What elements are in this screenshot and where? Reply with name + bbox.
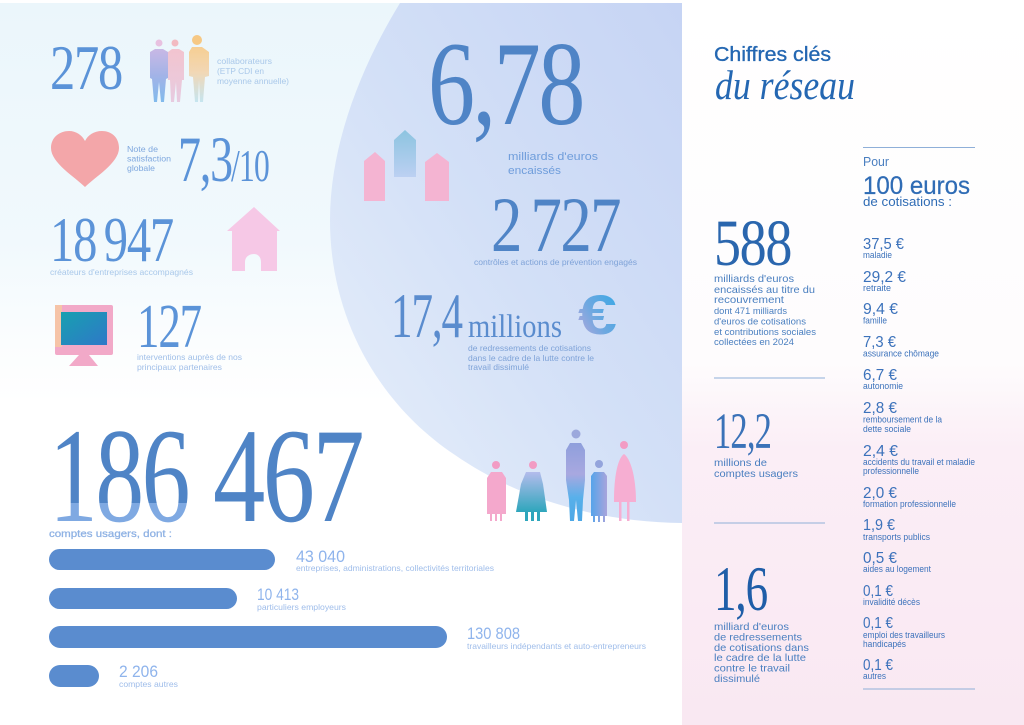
item: autres: 0,1 € <box>863 657 893 674</box>
stat: satisfaction note: /10 <box>231 141 269 191</box>
stat: 1,6 milliard: dissimulé <box>714 673 760 685</box>
item: remboursement de la dette sociale: 2,8 € <box>863 400 897 417</box>
item: invalidité décès: 0,1 € <box>863 583 893 600</box>
stat: satisfaction note: satisfaction <box>127 154 171 164</box>
stat: 588 milliards: d'euros de cotisations <box>714 316 807 326</box>
item: remboursement de la dette sociale <box>863 400 942 434</box>
item: autonomie: autonomie <box>863 381 903 391</box>
item: autres <box>863 657 893 681</box>
stat: 6,78 milliards: milliards d'euros <box>508 151 599 163</box>
stat: 17,4 millions: millions <box>468 309 562 345</box>
item: famille: famille <box>863 316 887 326</box>
stat: 6,78 milliards: 6,78 <box>428 17 583 150</box>
item: accidents du travail: professionnelle <box>863 466 919 476</box>
stat: 17,4 millions: 17,4 <box>391 281 463 351</box>
stat: 278 collaborateurs <box>50 33 289 103</box>
stat: 18 947 créateurs: 18 947 <box>50 205 173 275</box>
stat: 1,6 milliard: 1,6 <box>714 553 767 624</box>
item: autonomie: 6,7 € <box>863 367 897 384</box>
bar: 2 206 <box>49 662 178 689</box>
stat: 127 interventions: interventions auprès de nos <box>137 352 242 362</box>
stat: 278 collaborateurs: moyenne annuelle) <box>217 76 289 86</box>
item: assurance chômage <box>863 334 939 358</box>
item: emploi des travailleurs handicapés <box>863 615 945 649</box>
icon: three buildings <box>364 130 449 201</box>
icon: three people <box>150 35 209 102</box>
item: accidents du travail: 2,4 € <box>863 443 898 460</box>
bar chart: comptes usagers <box>49 547 646 689</box>
item: retraite <box>863 269 906 293</box>
stat: 12,2 millions: millions de <box>714 457 767 469</box>
panel: background left <box>0 0 682 725</box>
stat: 2 727 contrôles: contrôles et actions de prévention engagés <box>474 257 637 267</box>
icon: monitor <box>55 305 113 366</box>
bar: 2 206: comptes autres <box>119 679 178 689</box>
stat: 588 milliards: et contributions sociales <box>714 327 817 337</box>
item: retraite: retraite <box>863 283 891 293</box>
panel: background right <box>682 0 1024 725</box>
stat: satisfaction note: 7,3 <box>178 124 232 196</box>
bar: 10 413: particuliers employeurs <box>257 602 346 612</box>
stat: 186 467 comptes usagers: 467 <box>213 402 362 551</box>
item: emploi des travailleurs handicapés: emploi des travailleurs <box>863 630 945 640</box>
bar: 2 206: 2 206 <box>119 662 158 681</box>
stat: 1,6 milliard: de cotisations dans <box>714 642 809 654</box>
stat: 12,2 millions: comptes usagers <box>714 468 798 480</box>
stat: 588 milliards: encaissés au titre du <box>714 284 815 296</box>
stat: 6,78 milliards <box>364 17 599 201</box>
stat: 127 interventions <box>55 293 242 372</box>
item: formation professionnelle: formation professionnelle <box>863 499 956 509</box>
bar: 130 808: 130 808 <box>467 624 520 643</box>
stat: 278 collaborateurs: collaborateurs <box>217 56 272 66</box>
item: formation professionnelle: 2,0 € <box>863 485 897 502</box>
icon: house <box>227 207 280 271</box>
item: autres: autres <box>863 671 886 681</box>
list heading: pour 100 euros: 100 euros <box>863 172 970 200</box>
stat: 6,78 milliards: encaissés <box>508 165 562 177</box>
stat: 278 collaborateurs: 278 <box>50 33 122 103</box>
stat: 127 interventions: 127 <box>137 293 201 361</box>
list heading: pour 100 euros: de cotisations : <box>863 194 952 209</box>
icon: euro: € <box>578 283 617 346</box>
item: remboursement de la dette sociale: dette sociale <box>863 424 911 434</box>
title <box>714 44 855 108</box>
stat: 588 milliards: milliards d'euros <box>714 273 794 285</box>
stat: 2 727 contrôles: 2 727 <box>491 181 620 268</box>
stat: 186 467 comptes usagers: comptes usagers, dont : <box>49 528 172 540</box>
item: autonomie <box>863 367 903 391</box>
stat: 186 467 comptes usagers: 186 <box>49 402 188 551</box>
item: remboursement de la dette sociale: remboursement de la <box>863 414 942 424</box>
stat: 1,6 milliard: de redressements <box>714 632 802 644</box>
stat: satisfaction note <box>51 124 269 196</box>
item: maladie <box>863 236 904 260</box>
item: famille <box>863 301 898 326</box>
item: invalidité décès: invalidité décès <box>863 597 920 607</box>
list heading: pour 100 euros: Pour <box>863 155 889 169</box>
item: aides au logement: aides au logement <box>863 564 931 574</box>
bar: 43 040: 43 040 <box>296 547 345 566</box>
stat: 588 milliards: dont 471 milliards <box>714 306 788 316</box>
item: invalidité décès <box>863 583 920 607</box>
item: emploi des travailleurs handicapés: 0,1 € <box>863 615 893 632</box>
stat: 1,6 milliard: le cadre de la lutte <box>714 652 806 664</box>
stat: 17,4 millions: dans le cadre de la lutte contre le <box>468 353 594 363</box>
bar: 130 808 <box>49 624 646 651</box>
stat: 1,6 milliard: contre le travail <box>714 662 790 674</box>
item: assurance chômage: assurance chômage <box>863 348 939 358</box>
stat: 588 milliards: collectées en 2024 <box>714 337 794 347</box>
stat: 186 467 comptes usagers <box>49 402 362 551</box>
item: formation professionnelle <box>863 485 956 509</box>
stat: 588 milliards: 588 <box>714 207 791 280</box>
item: transports publics <box>863 517 930 542</box>
list heading: pour 100 euros <box>863 147 975 209</box>
item: assurance chômage: 7,3 € <box>863 334 896 351</box>
item: maladie: 37,5 € <box>863 236 904 253</box>
bar: 130 808: travailleurs indépendants et auto-entrepreneurs <box>467 641 646 651</box>
stat: 17,4 millions: travail dissimulé <box>468 362 529 372</box>
title: du réseau <box>715 62 855 108</box>
stat: satisfaction note: Note de <box>127 144 158 154</box>
stat: 278 collaborateurs: (ETP CDI en <box>217 66 264 76</box>
item: transports publics: 1,9 € <box>863 517 895 534</box>
icon: heart <box>51 131 119 187</box>
item: accidents du travail: accidents du travail et maladie <box>863 457 975 467</box>
bar: 43 040: entreprises, administrations, collectivités territoriales <box>296 563 494 573</box>
title: Chiffres clés <box>714 44 831 66</box>
bar: 10 413: 10 413 <box>257 585 299 604</box>
stat: 127 interventions: principaux partenaires <box>137 362 222 372</box>
item: accidents du travail <box>863 443 975 476</box>
stat: 12,2 millions: 12,2 <box>714 404 771 460</box>
item: retraite: 29,2 € <box>863 269 906 286</box>
list: répartition des cotisations <box>863 236 975 681</box>
stat: satisfaction note: globale <box>127 163 155 173</box>
item: transports publics: transports publics <box>863 532 930 542</box>
stat: 588 milliards <box>714 207 817 347</box>
icon: family <box>487 430 636 522</box>
item: aides au logement <box>863 550 931 574</box>
stat: 18 947 créateurs: créateurs d'entreprises accompagnés <box>50 267 193 277</box>
stat: 1,6 milliard: milliard d'euros <box>714 621 789 633</box>
item: aides au logement: 0,5 € <box>863 550 897 567</box>
item: famille: 9,4 € <box>863 301 898 318</box>
item: maladie: maladie <box>863 250 892 260</box>
bar: 10 413 <box>49 585 346 612</box>
item: emploi des travailleurs handicapés: handicapés <box>863 639 906 649</box>
bar: 43 040 <box>49 547 494 573</box>
stat: 17,4 millions: de redressements de cotisations <box>468 343 591 353</box>
stat: 1,6 milliard <box>714 553 809 685</box>
stat: 17,4 millions <box>391 281 617 372</box>
stat: 588 milliards: recouvrement <box>714 294 784 306</box>
